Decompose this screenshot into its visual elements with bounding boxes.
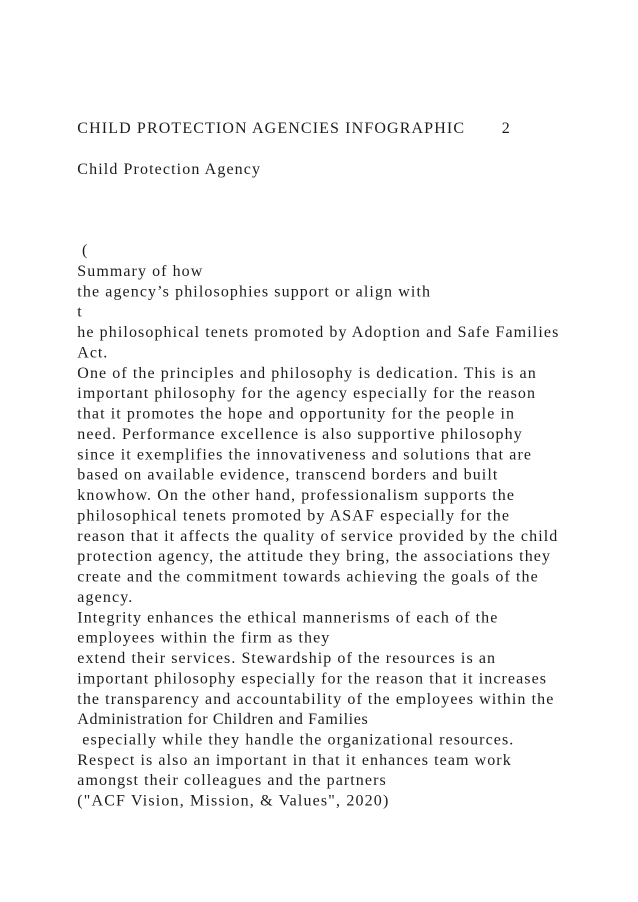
text block: first paragraph: create and the commitment towards achieving the goals of the [77,568,538,586]
text block: first paragraph: need. Performance excellence is also supportive philosophy [77,426,522,443]
text block: second paragraph: Integrity enhances the ethical mannerisms of each of the [77,609,497,626]
text block: summary heading: t [77,304,82,321]
text block: second paragraph: especially while they handle the organizational resources. [82,732,513,748]
text block: second paragraph: the transparency and accountability of the employees within the [77,691,553,708]
text block: first paragraph: protection agency, the attitude they bring, the associations they [77,548,550,565]
text block: summary heading [77,263,558,362]
text block: second paragraph: ("ACF Vision, Mission, & Values", 2020) [77,793,388,810]
text block: second paragraph: amongst their colleagues and the partners [77,772,386,789]
text block: second paragraph: extend their services. Stewardship of the resources is an [77,650,495,667]
text block: summary heading: Act. [77,344,107,362]
text block: second paragraph: Respect is also an important in that it enhances team work [77,752,511,769]
opening parenthesis: ( [82,242,87,259]
text block: first paragraph: since it exemplifies the innovativeness and solutions that are [77,446,531,463]
text block: first paragraph: reason that it affects the quality of service provided by the child [77,528,557,545]
text block: first paragraph: based on available evidence, transcend borders and built [77,467,498,484]
text block: first paragraph: One of the principles and philosophy is dedication. This is an [77,365,536,382]
text block: second paragraph: employees within the firm as they [77,630,329,647]
text block: summary heading: Summary of how [77,263,203,280]
text block: first paragraph: that it promotes the hope and opportunity for the people in [77,406,514,423]
text block: second paragraph [77,609,553,810]
text block: first paragraph [77,365,557,606]
text block: first paragraph: important philosophy for the agency especially for the reason [77,385,535,402]
text block: summary heading: the agency’s philosophies support or align with [77,283,430,300]
text block: first paragraph: agency. [77,589,132,606]
text block: second paragraph: Administration for Children and Families [77,711,368,728]
text block: first paragraph: knowhow. On the other hand, professionalism supports the [77,487,514,504]
text block: first paragraph: philosophical tenets promoted by ASAF especially for the [77,507,509,524]
heading: agency: Child Protection Agency [77,161,260,178]
running header: CHILD PROTECTION AGENCIES INFOGRAPHIC [77,120,464,137]
text block: summary heading: he philosophical tenets promoted by Adoption and Safe Families [77,324,558,341]
text block: second paragraph: important philosophy especially for the reason that it increases [77,670,546,687]
running header: 2 [502,120,510,137]
